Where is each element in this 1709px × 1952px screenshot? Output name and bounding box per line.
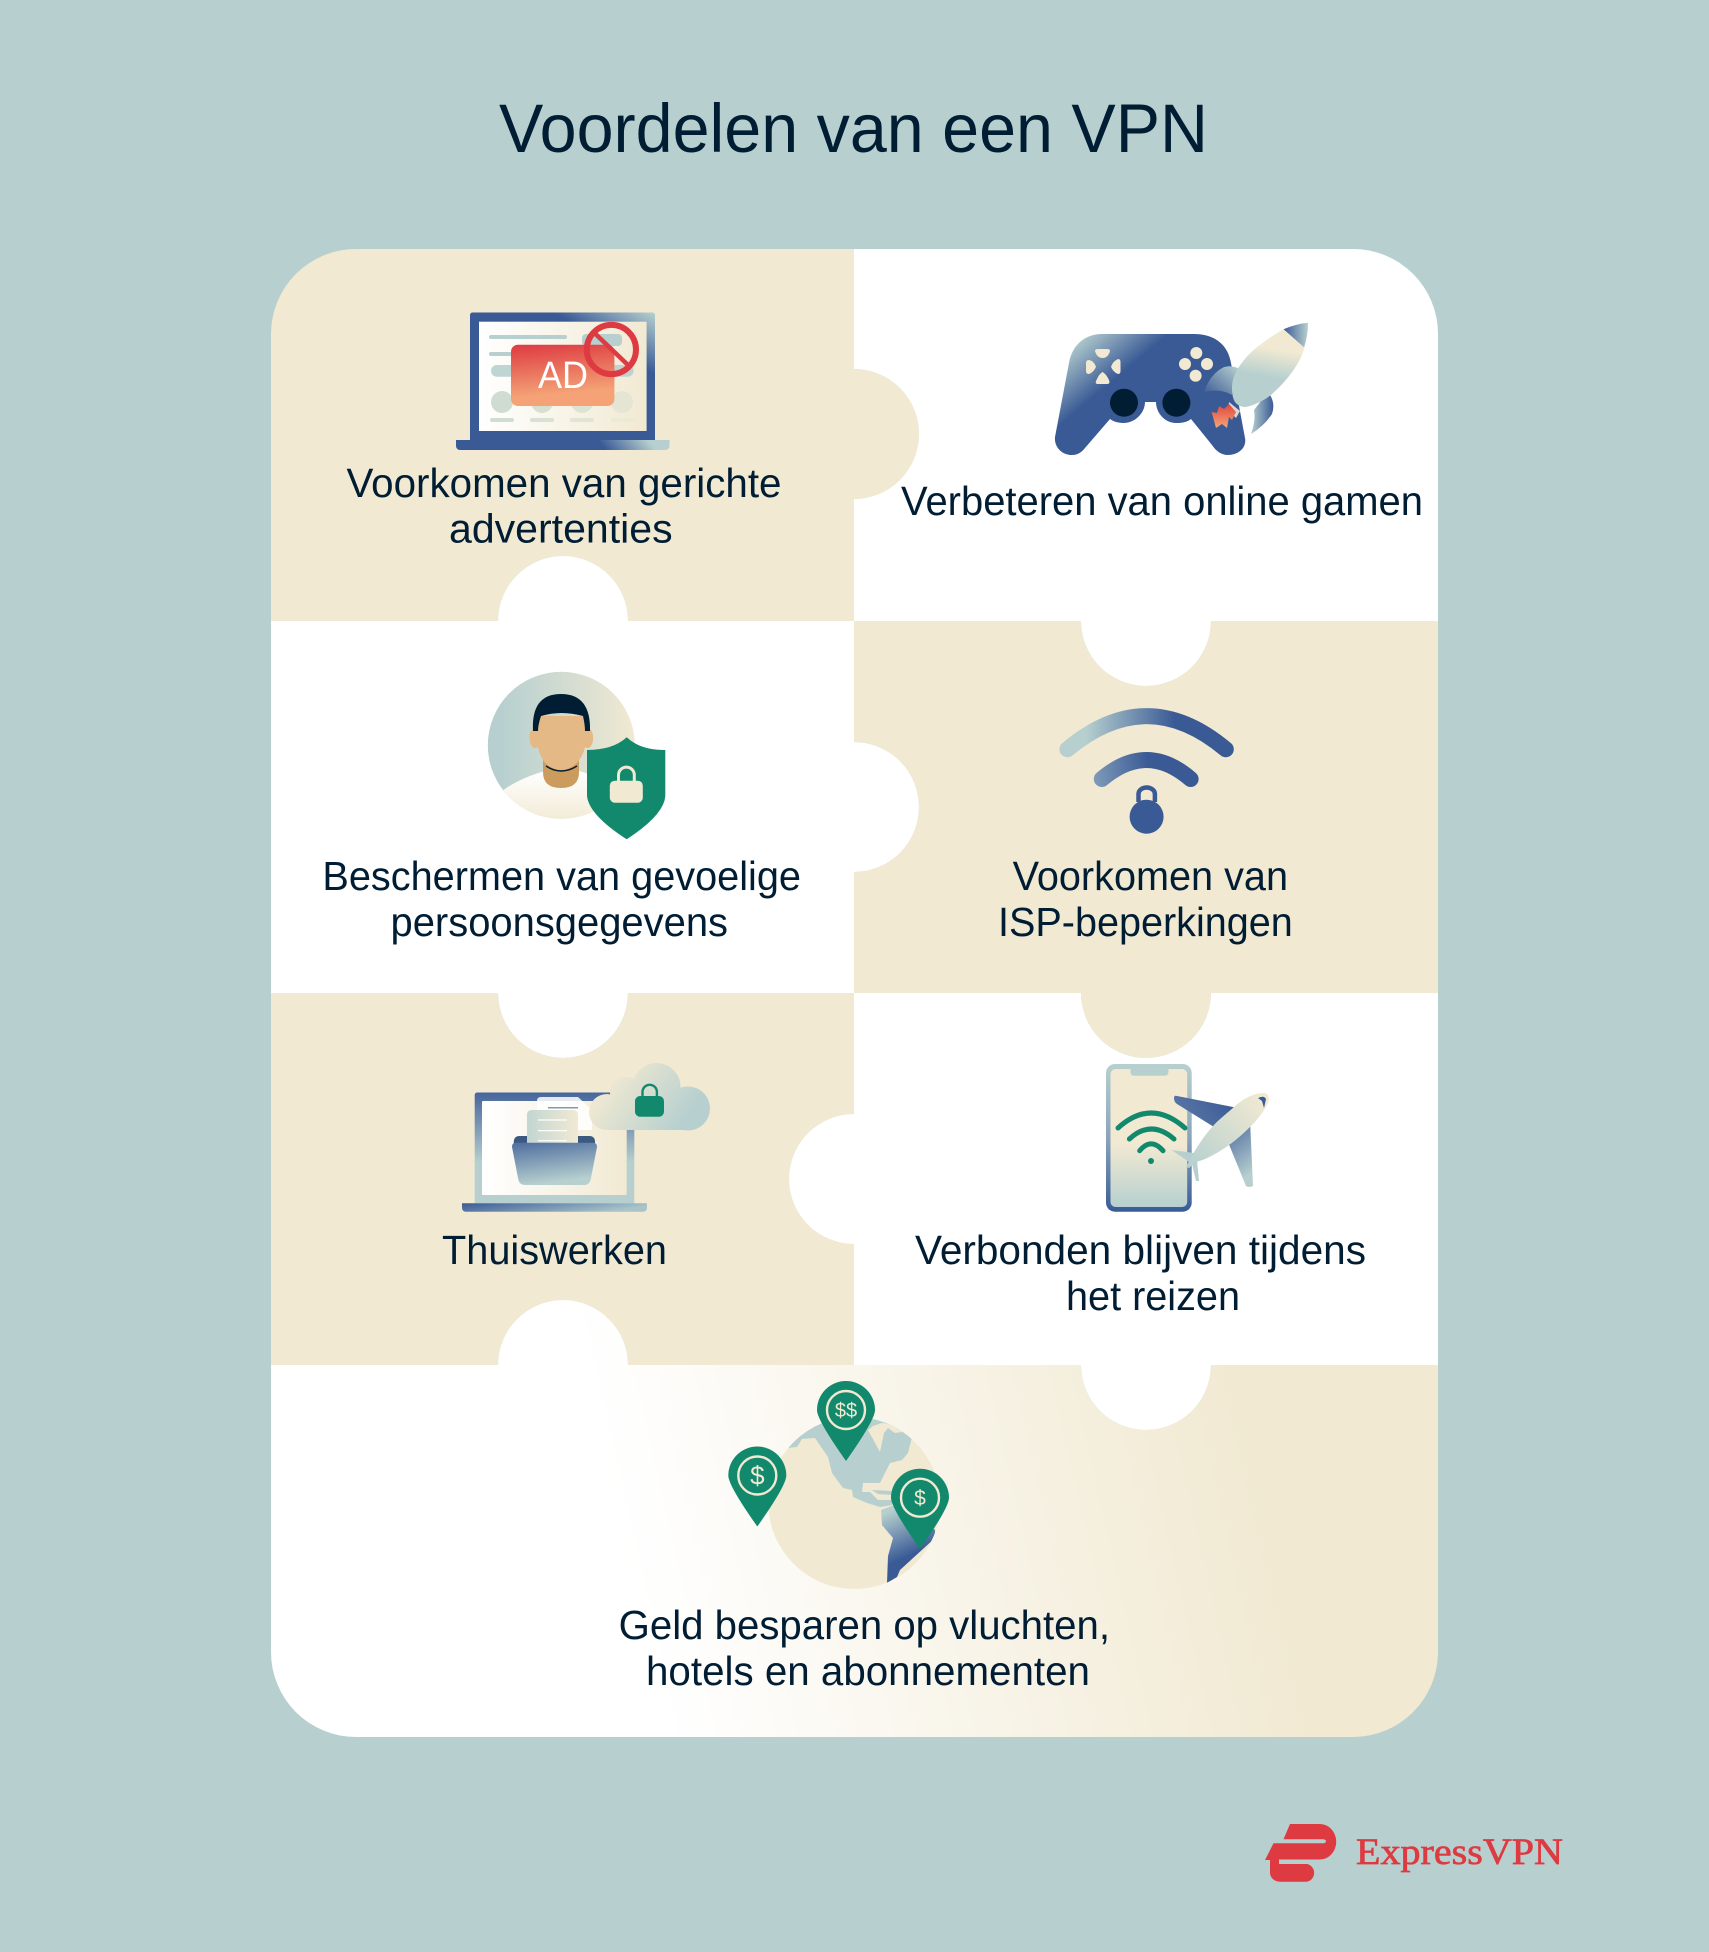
text: verbeteren van online gamen: Verbeteren van online gamen: [901, 478, 1423, 524]
wordmark: ExpressVPN: [1356, 1832, 1563, 1873]
panel: thuiswerken: [271, 993, 854, 1365]
icon: globe with price pins: $: [750, 1460, 765, 1490]
panel: verbeteren van online gamen: [854, 249, 1438, 686]
icon: globe with price pins: $: [914, 1487, 926, 1510]
text: geld besparen op vluchten, hotels en abonnementen: hotels en abonnementen: [646, 1648, 1090, 1694]
panel: voorkomen van ISP-beperkingen: [854, 621, 1438, 1058]
icon: laptop with folder and cloud: [462, 1063, 710, 1212]
icon: ExpressVPN mark: [1265, 1824, 1336, 1882]
icon: laptop with blocked ad: AD: [538, 355, 588, 397]
icon: laptop with blocked ad: [456, 312, 670, 450]
panel: verbonden blijven tijdens het reizen: [789, 993, 1438, 1430]
logo: ExpressVPN: [1265, 1824, 1563, 1882]
text: voorkomen van ISP-beperkingen: Voorkomen van: [1013, 853, 1288, 899]
text: geld besparen op vluchten, hotels en abonnementen: [619, 1602, 1110, 1694]
text: geld besparen op vluchten, hotels en abonnementen: Geld besparen op vluchten,: [619, 1602, 1110, 1648]
panel: voorkomen van gerichte advertenties: [271, 249, 919, 621]
text: verbonden blijven tijdens het reizen: [915, 1227, 1366, 1319]
text: voorkomen van gerichte advertenties: [346, 460, 782, 552]
text: beschermen van gevoelige persoonsgegevens: [322, 853, 801, 945]
panel: beschermen van persoonsgegevens: [271, 556, 919, 1058]
icon: gamepad with rocket: [1055, 323, 1308, 455]
text: voorkomen van gerichte advertenties: advertenties: [449, 506, 673, 552]
icon: phone with wifi and airplane: [1106, 1064, 1269, 1212]
icon: globe with price pins: [728, 1381, 949, 1589]
text: voorkomen van ISP-beperkingen: ISP-beperkingen: [998, 899, 1293, 945]
title: Voordelen van een VPN: [499, 90, 1208, 167]
panel: geld besparen: [271, 1300, 1438, 1737]
text: voorkomen van ISP-beperkingen: [998, 853, 1293, 945]
text: beschermen van gevoelige persoonsgegevens: persoonsgegevens: [390, 899, 728, 945]
text: verbonden blijven tijdens het reizen: Verbonden blijven tijdens: [915, 1227, 1366, 1273]
text: verbonden blijven tijdens het reizen: het reizen: [1066, 1273, 1240, 1319]
icon: wifi with padlock: [1067, 716, 1226, 834]
icon: person with shield: [488, 672, 665, 839]
text: beschermen van gevoelige persoonsgegevens: Beschermen van gevoelige: [322, 853, 801, 899]
text: voorkomen van gerichte advertenties: Voorkomen van gerichte: [346, 460, 782, 506]
icon: globe with price pins: $$: [835, 1400, 857, 1422]
text: thuiswerken: Thuiswerken: [442, 1227, 667, 1273]
